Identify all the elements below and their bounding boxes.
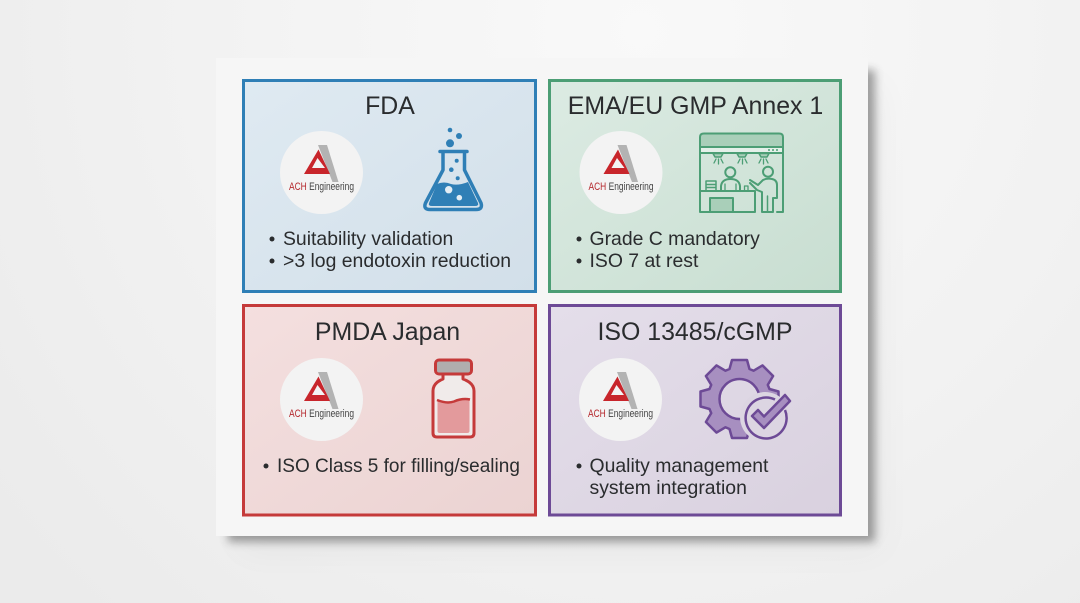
heading: ISO 13485/cGMP: ISO 13485/cGMP [597, 318, 793, 346]
panel: ISO 13485/cGMP [550, 306, 840, 515]
logo: ACH Engineering [579, 358, 662, 441]
bullets: FDA: Suitability validation [283, 228, 453, 250]
bullets: ISO: Quality management [590, 455, 769, 477]
bullets: ISO [576, 455, 769, 499]
bullets: EMA: ISO 7 at rest [590, 250, 699, 272]
heading: FDA: FDA [365, 92, 415, 120]
bullets: ISO: system integration [590, 477, 747, 499]
heading: EMA/EU GMP Annex 1: EMA/EU GMP Annex 1 [568, 92, 823, 120]
paper sheet [216, 58, 880, 550]
bullet: PMDA: ISO Class 5 for filling/sealing [277, 456, 520, 477]
icon: vial [433, 360, 474, 437]
logo: ACH Engineering: ACH Engineering [588, 181, 654, 193]
icon: cleanroom [700, 134, 783, 212]
logo: ACH Engineering: ACH Engineering [588, 408, 653, 420]
bullets: EMA: Grade C mandatory [590, 228, 760, 250]
panel: EMA/EU GMP Annex 1 [550, 80, 840, 292]
logo: ACH Engineering: ACH Engineering [289, 181, 354, 193]
logo: ACH Engineering: ACH Engineering [289, 408, 354, 420]
panel: FDA [244, 80, 536, 292]
logo: ACH Engineering [280, 358, 363, 441]
panel: PMDA Japan [244, 306, 536, 515]
icon: flask [425, 128, 481, 210]
logo: ACH Engineering [580, 131, 662, 214]
bullets: EMA [576, 228, 760, 272]
bullets: FDA: >3 log endotoxin reduction [283, 250, 511, 272]
bullets: FDA [270, 228, 511, 272]
heading: PMDA Japan: PMDA Japan [315, 318, 460, 346]
logo: ACH Engineering [280, 131, 363, 214]
icon: gear with check [700, 360, 790, 442]
